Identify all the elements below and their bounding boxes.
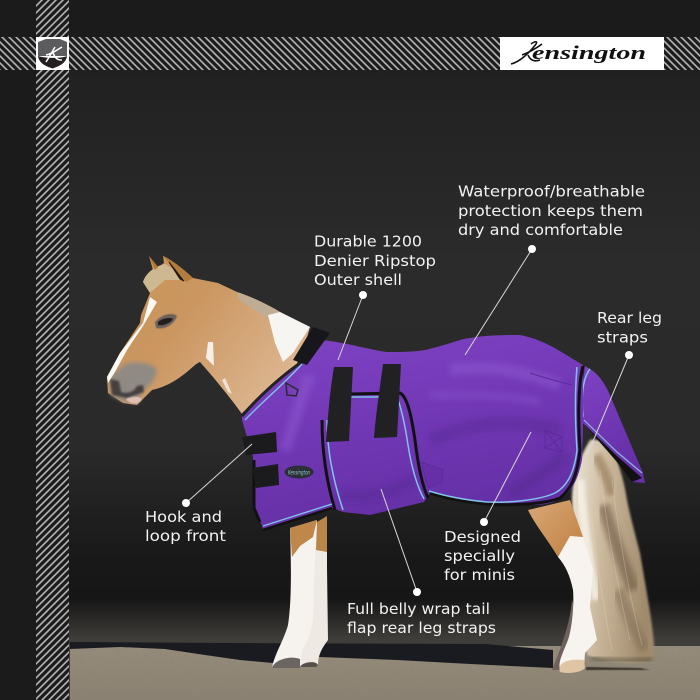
D ring — [286, 383, 298, 396]
eye — [155, 314, 177, 328]
callout: rear leg straps — [586, 309, 662, 458]
callout: waterproof: protection keeps them — [458, 202, 643, 220]
forelock — [143, 264, 186, 293]
belly wrap edge — [322, 393, 428, 510]
brand patch — [284, 466, 314, 478]
callout: waterproof — [458, 182, 645, 355]
callout: durable shell: Denier Ripstop — [314, 252, 436, 270]
callout: waterproof: Waterproof/breathable — [458, 182, 645, 200]
callout: designed for minis — [444, 432, 531, 584]
callout: full belly wrap: flap rear leg straps — [347, 619, 496, 637]
far front leg — [298, 517, 328, 667]
callout: durable shell: Durable 1200 — [314, 232, 422, 250]
front closure straps — [242, 432, 277, 455]
nose — [110, 379, 144, 398]
callout: designed for minis: for minis — [444, 566, 515, 584]
callout: designed for minis: specially — [444, 547, 515, 565]
callout: durable shell: Outer shell — [314, 271, 402, 289]
callout: durable shell — [314, 232, 436, 360]
near front leg — [272, 520, 317, 668]
lip — [126, 397, 142, 404]
logo: Kensington wordmark: ensington — [532, 43, 646, 64]
ears — [149, 256, 158, 270]
top straps — [326, 367, 353, 442]
callout: waterproof: dry and comfortable — [458, 221, 623, 239]
head and neck — [107, 256, 310, 414]
rug folds — [285, 368, 565, 496]
logo: Kensington wordmark — [500, 37, 664, 70]
muzzle — [110, 362, 157, 403]
callout: hook and loop: loop front — [145, 527, 226, 545]
rug body — [242, 335, 583, 529]
callout: full belly wrap — [347, 489, 496, 637]
callout: hook and loop: Hook and — [145, 508, 222, 526]
icon: K shield logo — [36, 37, 69, 70]
fleece collar — [293, 327, 330, 365]
callout: designed for minis: Designed — [444, 528, 521, 546]
callout: full belly wrap: Full belly wrap tail — [347, 600, 490, 618]
near rear leg — [528, 500, 583, 557]
callout: rear leg straps: Rear leg — [597, 309, 662, 327]
tail — [572, 440, 654, 663]
white neck patch — [268, 312, 310, 362]
callout: rear leg straps: straps — [597, 328, 648, 346]
mane — [237, 292, 280, 318]
callout: hook and loop — [145, 444, 252, 545]
rug neckline — [242, 361, 303, 416]
ground — [70, 642, 700, 700]
blaze — [107, 297, 157, 383]
far rear leg — [552, 600, 578, 670]
rug tail flap — [581, 366, 645, 483]
brand patch: Kensington — [288, 470, 310, 476]
horse — [107, 256, 654, 673]
rug rear edge — [430, 366, 583, 505]
